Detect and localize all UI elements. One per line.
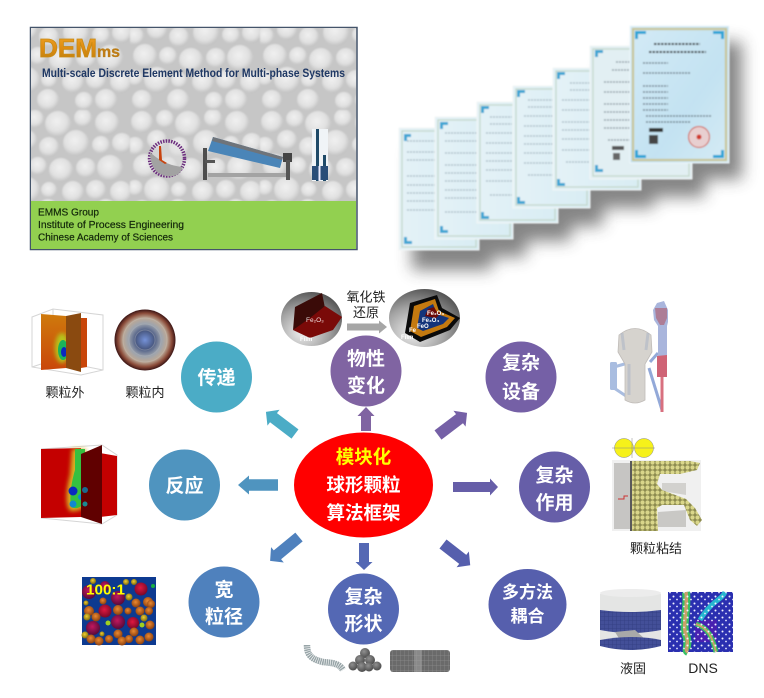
icon: iron oxide particle after reduction: Fe₂O₃ xyxy=(427,311,444,317)
green footer band xyxy=(31,201,356,249)
node: multi-method coupling: 耦合 xyxy=(510,606,544,626)
node: complex interaction xyxy=(519,452,590,522)
icon: iron oxide particle after reduction: FeO xyxy=(417,324,429,330)
panel: software copyright certificates xyxy=(399,26,742,270)
certificate 5 xyxy=(553,68,641,190)
footer text: Institute of Process Engineering xyxy=(38,219,184,231)
node: complex equipment: 设备 xyxy=(502,381,540,403)
node: complex shape xyxy=(328,574,399,644)
label: iron oxide reduction: 氧化铁 xyxy=(346,290,386,304)
label: particle exterior: 颗粒外 xyxy=(45,385,85,400)
icon: iron oxide particle after reduction: Film xyxy=(401,335,413,341)
icon: wide size distribution 100:1: 100:1 xyxy=(86,582,125,598)
node: transfer xyxy=(181,342,252,412)
icon: dual column xyxy=(312,129,328,181)
center node: modular framework: 模块化 xyxy=(336,446,391,468)
certificate shadow xyxy=(412,42,742,270)
certificate 3 xyxy=(477,102,558,223)
certificate 4 xyxy=(513,86,590,208)
icon: iron oxide particle after reduction: Fe xyxy=(409,328,417,334)
logo: DEMms: DEM xyxy=(39,33,97,63)
background: particle photo xyxy=(28,25,360,205)
icon: iron oxide particle before reduction: Film xyxy=(300,337,312,343)
arrow: to multi-method coupling xyxy=(437,536,476,573)
icon: particle bonding xyxy=(612,438,702,531)
arrow: to complex equipment xyxy=(432,405,473,443)
panel: DEMms software banner xyxy=(28,25,360,250)
node: complex interaction: 作用 xyxy=(535,492,574,514)
node: complex shape: 复杂 xyxy=(344,586,383,608)
arrow: to property change xyxy=(358,407,374,431)
icon: iron oxide particle after reduction: Fe₃O₄ xyxy=(422,318,439,324)
icon: meshed cylinder xyxy=(390,650,450,672)
node: wide particle size xyxy=(188,566,260,638)
icon: iron oxide particle before reduction: Fe₂O₃ xyxy=(306,317,324,324)
footer text: Chinese Academy of Sciences xyxy=(38,232,173,244)
node: multi-method coupling: 多方法 xyxy=(502,582,553,602)
node: wide particle size: 宽 xyxy=(214,578,234,601)
node: multi-method coupling xyxy=(488,569,566,640)
center node: modular framework: 球形颗粒 xyxy=(326,474,401,496)
label: DNS: DNS xyxy=(688,660,718,676)
icon: DNS flow field xyxy=(668,592,733,652)
icon: liquid-solid stirred tank xyxy=(600,589,661,650)
label: particle interior: 颗粒内 xyxy=(125,385,165,400)
footer text xyxy=(38,206,184,244)
icon: chain of spheres xyxy=(307,645,343,670)
icon: particle exterior field cube xyxy=(32,309,103,375)
node: property change: 变化 xyxy=(347,374,385,397)
certificate 1 xyxy=(399,128,479,250)
icon: fluidized bed equipment xyxy=(610,301,668,412)
node: property change xyxy=(330,336,402,406)
label: iron oxide reduction: 还原 xyxy=(353,305,379,320)
node: complex equipment: 复杂 xyxy=(502,352,540,374)
label: liquid-solid: 液固 xyxy=(620,661,646,676)
node: wide particle size: 粒径 xyxy=(205,606,243,628)
center node: modular framework xyxy=(294,432,433,538)
arrow: reduction xyxy=(347,320,387,334)
footer text: EMMS Group xyxy=(38,206,99,218)
icon: iron oxide particle after reduction xyxy=(389,289,460,347)
certificate 7 front xyxy=(630,26,729,163)
arrow: to transfer xyxy=(260,404,301,442)
icon: sphere cluster xyxy=(348,648,382,672)
node: transfer: 传递 xyxy=(197,367,236,389)
icon: reaction field cube xyxy=(41,445,117,524)
node: complex equipment xyxy=(486,342,556,412)
arrow: to complex interaction xyxy=(453,478,498,496)
arrow: to reaction xyxy=(238,476,278,494)
certificate 2 xyxy=(435,117,513,239)
node: property change: 物性 xyxy=(347,348,385,370)
label: iron oxide reduction xyxy=(346,290,386,320)
label: particle bonding: 颗粒粘结 xyxy=(630,541,682,556)
icon: rotating drum xyxy=(150,141,184,176)
logo: DEMms: ms xyxy=(97,44,120,61)
icon: particle interior sphere xyxy=(114,310,176,370)
node: reaction xyxy=(149,450,220,520)
icon: wide size distribution 100:1 xyxy=(82,577,156,646)
icon: inclined reactor xyxy=(203,137,292,180)
certificate 6 xyxy=(590,46,692,179)
node: complex interaction: 复杂 xyxy=(535,464,574,486)
arrow: to complex shape xyxy=(356,543,372,570)
icon: iron oxide particle before reduction xyxy=(281,292,342,346)
center node: modular framework: 算法框架 xyxy=(326,502,401,524)
node: reaction: 反应 xyxy=(165,474,204,497)
banner title: Multi-scale Discrete Element Method for Multi-phase Systems xyxy=(42,66,345,80)
arrow: to wide particle size xyxy=(264,529,305,569)
node: complex shape: 形状 xyxy=(344,613,383,635)
